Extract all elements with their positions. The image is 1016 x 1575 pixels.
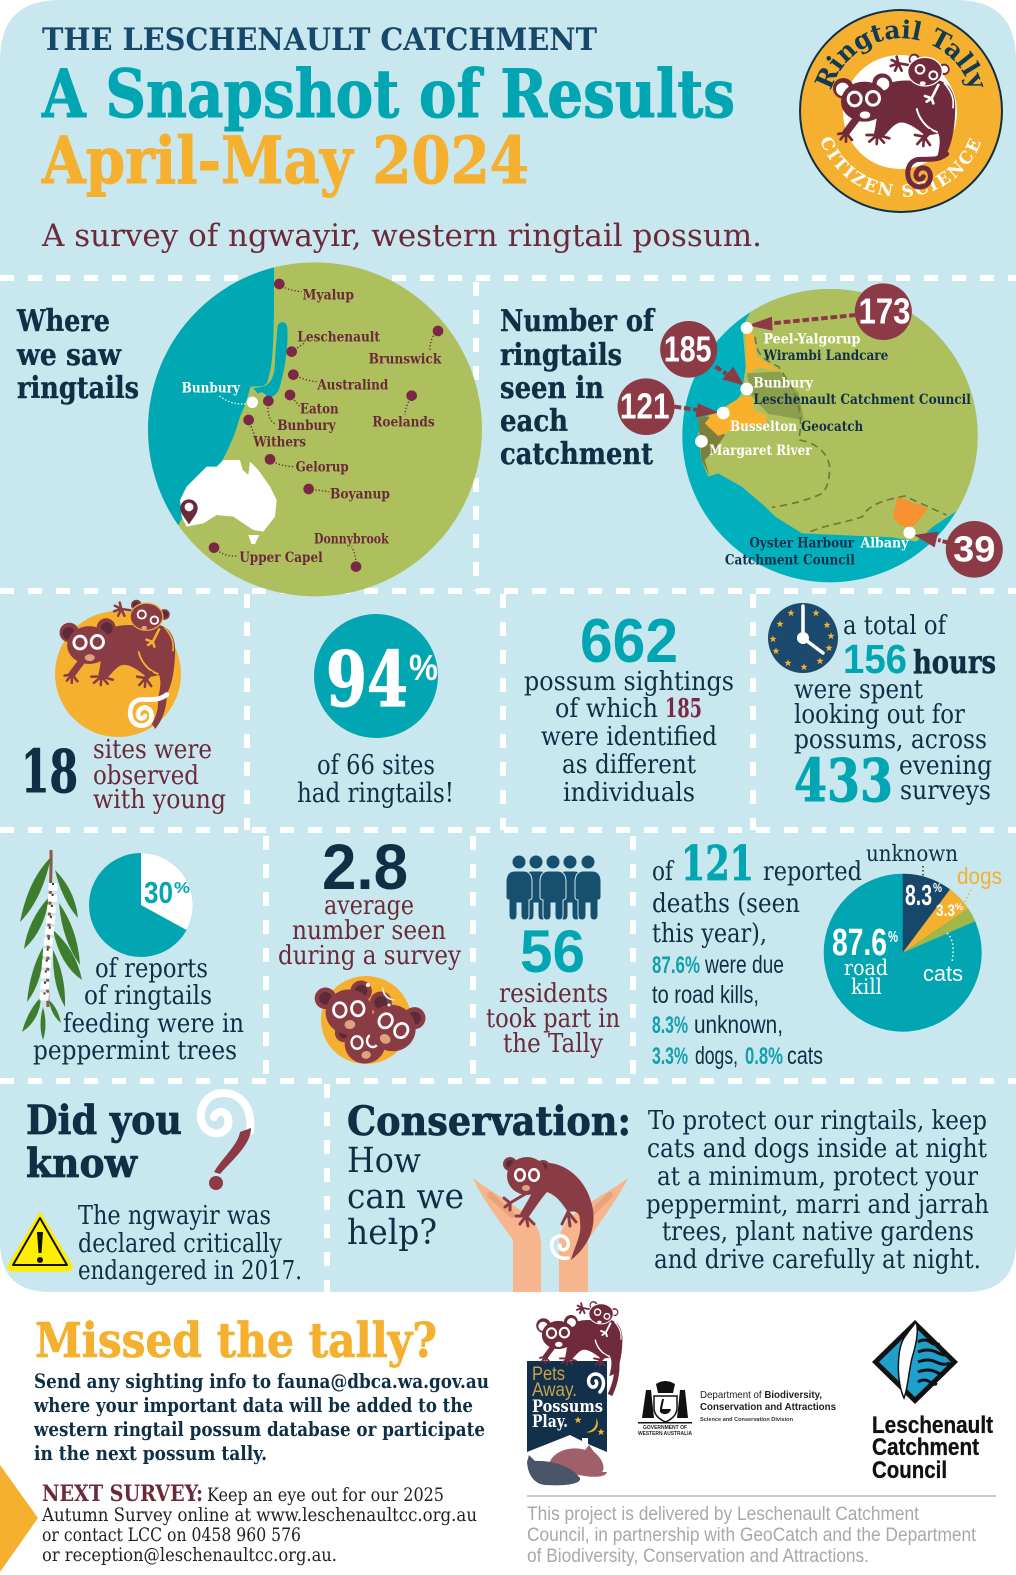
text: deaths summary: cats (787, 1042, 823, 1070)
text: reports of ringtails feeding: feeding were in (63, 1009, 244, 1039)
pie chart: causes of death (824, 842, 1002, 1032)
logo: pets away possums play: Play. (532, 1412, 568, 1432)
heading: where we saw ringtails: Where (16, 304, 110, 339)
pie chart: causes of death: unknown (866, 842, 958, 867)
map: survey sites: Bunbury (182, 381, 241, 397)
logo: leschenault catchment council: Council (872, 1457, 947, 1484)
panel: residents: 56 (520, 918, 585, 985)
panel: average number seen: average (324, 891, 414, 921)
icon: clock (768, 603, 838, 673)
logo: department of biodiversity, conservation and attractions (638, 1381, 836, 1437)
text: send sighting info (33, 1369, 489, 1465)
pie chart: causes of death: % (933, 880, 942, 895)
icon: possum on hands (473, 1157, 628, 1292)
pie chart: causes of death: 3.3 (936, 901, 955, 920)
text: deaths summary: unknown, (694, 1011, 783, 1039)
pie chart: causes of death: % (955, 902, 963, 912)
text: project acknowledgement (527, 1504, 977, 1567)
text: deaths summary: this year), (652, 919, 767, 949)
panel: average number seen (278, 831, 461, 1066)
text: deaths summary: reported (763, 857, 862, 887)
text: deaths summary: 0.8% (745, 1043, 783, 1070)
logo: department of biodiversity, conservation and attractions: Department of Biodiversity, (700, 1389, 822, 1401)
map: survey sites: Leschenault (297, 330, 381, 346)
pie chart: causes of death: 8.3 (905, 880, 932, 912)
panel: 662 sightings: of which (555, 694, 658, 724)
text: declared critically endangered: endangered in 2017. (78, 1256, 302, 1286)
map: catchments: Geocatch (801, 419, 863, 435)
text: declared critically endangered: The ngwayir was (78, 1201, 271, 1231)
text: sites observed with young: with young (93, 785, 226, 815)
panel: 662 sightings: 185 (665, 694, 702, 724)
arrow: orange pointer (0, 1465, 38, 1572)
text: how to protect ringtails (646, 1106, 989, 1275)
text: sites observed with young: sites were (93, 735, 212, 765)
text: how to protect ringtails: cats and dogs inside at night (647, 1134, 987, 1164)
panel: average number seen: 2.8 (322, 831, 408, 903)
heading: where we saw ringtails: we saw (16, 338, 122, 373)
text: reports of ringtails feeding (33, 954, 244, 1066)
logo: pets away possums play: Pets (532, 1364, 565, 1385)
panel: hours and surveys: 433 (794, 746, 893, 815)
icon: peppermint branch (20, 850, 82, 1040)
text: how to protect ringtails: trees, plant native gardens (662, 1217, 974, 1247)
text: project acknowledgement: of Biodiversity, Conservation and Attractions. (527, 1546, 869, 1567)
heading: number of ringtails: ringtails (500, 338, 622, 373)
panel: hours and surveys (768, 603, 996, 815)
map: catchments: 121 (620, 386, 670, 427)
map: catchments: Peel-Yalgorup (764, 331, 861, 347)
text: how to protect ringtails: at a minimum, protect your (657, 1162, 978, 1192)
logo: pets away possums play: Away. (532, 1380, 577, 1401)
panel: residents: the Tally (503, 1029, 603, 1059)
panel: number of ringtails per catchment (500, 277, 1003, 582)
number: 18: 18 (21, 737, 78, 806)
map: catchments: 185 (664, 328, 711, 369)
logo: leschenault catchment council (872, 1320, 993, 1484)
panel: 662 sightings (524, 607, 734, 808)
panel: where we saw ringtails (16, 260, 482, 596)
map: survey sites (133, 260, 482, 596)
text: how to protect ringtails: and drive carefully at night. (654, 1245, 981, 1275)
panel: 94 percent: 94 (326, 635, 408, 724)
pie chart: 30 percent: % (174, 880, 190, 897)
panel: 662 sightings: possum sightings (524, 667, 734, 697)
heading: did you know: Did you (26, 1097, 182, 1144)
panel: residents: residents (499, 979, 608, 1009)
map: catchments: Albany (860, 536, 909, 552)
heading: number of ringtails: seen in (500, 371, 604, 406)
panel: sites with young (21, 600, 226, 815)
panel: 94 percent: had ringtails! (297, 778, 454, 809)
logo: ringtail tally citizen science (799, 9, 1003, 213)
panel: average number seen: number seen (292, 916, 446, 946)
text: project acknowledgement: Council, in partnership with GeoCatch and the Department (527, 1525, 977, 1546)
map: catchments: Margaret River (709, 443, 812, 459)
logo: department of biodiversity, conservation and attractions: Science and Conservation Division (700, 1417, 794, 1423)
panel: average number seen: during a survey (278, 941, 461, 971)
panel: hours and surveys: hours (913, 643, 996, 681)
text: reports of ringtails feeding: peppermint trees (33, 1036, 237, 1066)
pie chart: causes of death: dogs (957, 863, 1002, 889)
text: send sighting info: western ringtail possum database or participate (33, 1417, 485, 1441)
panel: 662 sightings: were identified (541, 722, 717, 752)
panel: 662 sightings: 662 (580, 607, 678, 676)
map: survey sites: Myalup (303, 287, 354, 303)
date heading: April-May 2024 (41, 123, 529, 199)
panel: did you know (9, 1093, 302, 1286)
text: deaths summary: 8.3% (652, 1012, 688, 1039)
pie chart: causes of death: 87.6 (832, 922, 887, 964)
logo: ringtail tally citizen science: CITIZEN SCIENCE (822, 137, 981, 197)
panel: 662 sightings: individuals (563, 778, 695, 808)
panel: hours and surveys: evening (899, 751, 992, 781)
icon: people (506, 855, 601, 920)
map: catchments: Catchment Council (725, 552, 855, 568)
map: catchments: Busselton (730, 419, 797, 435)
map: survey sites: Withers (252, 435, 306, 451)
panel: 94 percent: % (409, 647, 438, 688)
text: next survey: Keep an eye out for our 2025 (207, 1485, 444, 1506)
text: send sighting info: where your important data will be added to the (33, 1393, 473, 1417)
heading: where we saw ringtails (16, 304, 139, 406)
text: reports of ringtails feeding: of ringtails (84, 981, 212, 1011)
text: deaths summary: 87.6% (652, 952, 700, 979)
pie chart: causes of death: kill (851, 975, 882, 999)
panel: hours and surveys: looking out for (794, 700, 965, 730)
map: catchments: Oyster Harbour (749, 536, 855, 552)
map: survey sites: Upper Capel (239, 550, 323, 566)
text: send sighting info: Send any sighting info to fauna@dbca.wa.gov.au (34, 1369, 489, 1393)
map: survey sites: Eaton (300, 401, 339, 417)
logo: department of biodiversity, conservation and attractions: Conservation and Attractions (700, 1401, 836, 1413)
heading: number of ringtails: catchment (500, 437, 653, 472)
text: next survey: Autumn Survey online at www.leschenaultcc.org.au (41, 1505, 477, 1526)
text: how can we help: can we (347, 1177, 464, 1217)
panel: 662 sightings: as different (562, 750, 696, 780)
map: survey sites: Australind (316, 377, 389, 393)
text: declared critically endangered (78, 1201, 302, 1286)
text: declared critically endangered: declared critically (78, 1229, 282, 1259)
panel: reported deaths (652, 836, 1002, 1070)
text: deaths summary: to road kills, (652, 981, 759, 1009)
map: survey sites: Bunbury (277, 418, 337, 434)
map: catchments: 39 (953, 528, 995, 569)
panel: conservation (347, 1098, 989, 1292)
pie chart: 30 percent: 30 (144, 875, 173, 910)
text: deaths summary: deaths (seen (652, 889, 800, 919)
text: reports of ringtails feeding: of reports (95, 954, 208, 984)
heading: number of ringtails: Number of (500, 304, 656, 339)
icon: three possum faces (314, 976, 430, 1066)
heading: the leschenault catchment: THE LESCHENAULT CATCHMENT (42, 22, 597, 58)
text: deaths summary: 121 (681, 836, 754, 892)
text: deaths summary: of (652, 857, 675, 887)
logo: pets away possums play: Possums (532, 1397, 603, 1417)
pie chart: 30 percent (89, 853, 193, 957)
map: catchments: Bunbury (753, 375, 814, 391)
logo: ringtail tally citizen science: Ringtail Tally (814, 20, 984, 90)
pie chart: causes of death: % (888, 929, 898, 946)
map: catchments: Leschenault Catchment Council (753, 392, 971, 408)
logo: department of biodiversity, conservation and attractions: GOVERNMENT OF (643, 1425, 688, 1431)
logo: leschenault catchment council: Catchment (872, 1434, 979, 1461)
map: survey sites: Donnybrook (314, 531, 389, 547)
panel: residents (486, 855, 620, 1059)
text: deaths summary: 3.3% (652, 1043, 688, 1070)
heading: number of ringtails (500, 304, 656, 472)
panel: hours and surveys: 156 (843, 636, 907, 682)
map: catchments: 173 (858, 290, 911, 331)
panel: residents: took part in (486, 1004, 620, 1034)
heading: did you know: know (26, 1140, 138, 1187)
text: sites observed with young (93, 735, 226, 815)
text: how can we help: How (347, 1141, 421, 1181)
logo: leschenault catchment council: Leschenault (872, 1412, 993, 1439)
text: deaths summary (652, 836, 862, 1070)
panel: hours and surveys: were spent (794, 675, 923, 705)
text: next survey (41, 1481, 477, 1566)
map: survey sites: Brunswick (369, 351, 442, 367)
panel: peppermint trees (20, 850, 244, 1066)
text: deaths summary: dogs, (695, 1042, 738, 1070)
map: survey sites: Boyanup (330, 487, 390, 503)
text: send sighting info: in the next possum tally. (34, 1441, 267, 1465)
title: A Snapshot of Results (41, 55, 735, 133)
heading: where we saw ringtails: ringtails (17, 371, 139, 406)
pie chart: causes of death: cats (923, 961, 963, 986)
heading: did you know (26, 1097, 182, 1187)
text: how can we help: help? (347, 1213, 437, 1253)
arrows (675, 315, 947, 547)
panel: missed the tally (0, 1313, 489, 1572)
icon: possum with young (55, 600, 181, 737)
panel: 94 percent (297, 614, 454, 809)
panel: hours and surveys: surveys (900, 776, 991, 806)
text: next survey: or reception@leschenaultcc.org.au. (42, 1545, 337, 1566)
heading: missed the tally: Missed the tally? (35, 1313, 437, 1369)
map: survey sites: Roelands (372, 415, 435, 431)
map: catchments: Wirambi Landcare (763, 348, 889, 364)
text: next survey: or contact LCC on 0458 960 576 (42, 1525, 301, 1546)
map: catchments (618, 277, 1003, 582)
logo: department of biodiversity, conservation and attractions: WESTERN AUSTRALIA (638, 1431, 692, 1437)
text: deaths summary: were due (704, 951, 784, 979)
subtitle: A survey of ngwayir, western ringtail possum. (41, 218, 762, 254)
text: sites observed with young: observed (93, 761, 199, 791)
icon: question mark swirl (201, 1093, 251, 1190)
icon: warning triangle (9, 1214, 71, 1270)
header titles (41, 22, 762, 254)
panel: 94 percent: of 66 sites (317, 750, 435, 781)
heading: conservation: Conservation: (347, 1098, 631, 1145)
heading: number of ringtails: each (500, 404, 568, 439)
text: next survey: NEXT SURVEY: (42, 1481, 203, 1507)
panel: hours and surveys: a total of (843, 611, 948, 641)
map: survey sites: Gelorup (296, 460, 349, 476)
pie chart: causes of death: road (844, 956, 888, 980)
text: project acknowledgement: This project is delivered by Leschenault Catchment (527, 1504, 920, 1525)
icon: wa crest (638, 1381, 692, 1424)
text: how can we help (347, 1141, 464, 1253)
panel: hours and surveys: possums, across (794, 725, 987, 755)
logo: pets away possums play (527, 1301, 622, 1485)
